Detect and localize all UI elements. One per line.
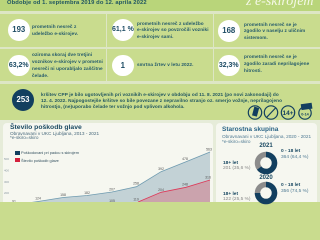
donut 2021: 2021 — [259, 143, 273, 149]
age subheading: *e-skiro=skiro — [222, 139, 251, 144]
stat: 63,2 %: oziroma skoraj dve tretjini — [32, 52, 92, 56]
violation icons: 14+ — [282, 110, 294, 117]
panel: head injuries chart — [3, 123, 213, 202]
stat: 168: zgodilo v naselju z uličnim — [244, 28, 305, 33]
area chart: 316 — [205, 176, 211, 180]
lower background — [0, 120, 320, 202]
violations text: 12. 4. 2022. Najpogostejše kršitve so bile povezane z nepravilno stranjo oz. smerjo vožnje, neprilagojeno — [41, 98, 282, 102]
labels 2021 adults — [223, 160, 250, 171]
labels 2021 adults: 18+ let — [223, 161, 238, 166]
legend: Poškodovani pri padcu s skirojem — [21, 150, 79, 155]
labels 2020 adults: 122 (25,5 %) — [223, 197, 250, 202]
area chart: 248 — [182, 182, 188, 186]
legend — [15, 150, 79, 163]
stat: 61,1 %: e-skirojev sami. — [137, 34, 173, 39]
header band — [0, 0, 320, 11]
age subheading — [222, 134, 311, 144]
stat: 63,2 % — [8, 52, 103, 78]
area chart: 158 — [60, 193, 66, 197]
labels 2021: 364 (64,4 %) — [281, 155, 308, 160]
stat: 61,1 % — [112, 19, 209, 41]
circle: 253: 253 — [16, 95, 30, 104]
labels 2020 adults — [223, 192, 250, 202]
stat: 32,3 %: prometnih nesreč se je — [244, 54, 297, 59]
violations band — [12, 89, 312, 120]
area chart: 119 — [133, 198, 139, 202]
age subheading: Obravnavani v UKC Ljubljana, 2020 - 2021 — [222, 134, 311, 139]
stat: 61,1 %: 61,1 % — [112, 26, 134, 33]
stat: 168: prometnih nesreč se je — [244, 22, 297, 27]
stat: 61,1 %: e-skirojev so povzročili vozniki — [137, 27, 209, 32]
labels 2020: 356 (74,5 %) — [281, 189, 308, 194]
chart subheading: *e-skiro=skiro — [10, 135, 39, 140]
area chart: 207 — [109, 188, 115, 192]
stat: 168: sistemom. — [244, 35, 268, 40]
stat: 63,2 %: 63,2% — [9, 62, 29, 68]
stat: 193 accidents — [8, 19, 78, 41]
stat: 1 fatality — [112, 55, 194, 76]
age heading: Starostna skupina — [222, 126, 278, 133]
stat: 32,3 %: 32,3% — [219, 62, 239, 68]
legend: Število poškodb glave — [21, 158, 59, 162]
area chart: 300 — [4, 180, 9, 184]
stat: 63,2 %: čelade. — [32, 73, 48, 78]
chart subheading — [10, 130, 99, 140]
stat: 193 accidents: udeležbo e-skirojev. — [32, 31, 78, 36]
area chart: 400 — [4, 168, 9, 172]
labels 2020 adults: 18+ let — [223, 192, 238, 197]
area chart: 204 — [158, 188, 164, 192]
period heading: Obdobje od 1. septembra 2019 do 12. aprila 2022 — [7, 0, 147, 6]
area chart: 124 — [35, 196, 41, 200]
labels 2020 — [281, 182, 308, 194]
labels 2021 — [281, 148, 308, 160]
stat: 63,2 %: voznikov e-skirojev v prometni — [32, 59, 103, 64]
donut 2021 — [254, 142, 278, 174]
stat: 193 accidents: 193 — [12, 25, 25, 34]
area chart — [4, 148, 212, 202]
area chart: 478 — [182, 157, 188, 161]
violations text: kršitev CPP je bilo ugotovljenih pri voznikih e-skirojev v obdobju od 11. 8. 2021 (po novi zakonodaji) do — [41, 92, 279, 96]
stat: 1 fatality: smrtna žrtev v letu 2022. — [137, 62, 193, 66]
stat: 168 — [218, 20, 305, 42]
stat: 193 accidents: prometnih nesreč z — [32, 24, 76, 29]
stat: 63,2 %: nesreči ni uporabljalo zaščitne — [32, 66, 103, 71]
donut 2020: 2020 — [259, 175, 273, 181]
circle: 253 — [12, 89, 34, 111]
area chart: 563 — [206, 148, 212, 152]
stat: 32,3 %: zgodilo zaradi neprilagojene — [244, 61, 309, 66]
donut 2020 — [254, 174, 278, 204]
panel: age group — [216, 123, 317, 202]
area chart: 258 — [133, 182, 139, 186]
stat: 32,3 % — [218, 54, 310, 76]
area chart: 392 — [158, 167, 164, 171]
area chart: 200 — [4, 191, 9, 195]
chart subheading: Obravnavani v UKC Ljubljana, 2013 - 2021 — [10, 130, 99, 136]
area chart: 500 — [4, 157, 9, 161]
chart heading: Število poškodb glave — [10, 124, 82, 131]
stat: 32,3 %: hitrosti. — [244, 68, 262, 72]
violations text — [41, 92, 282, 109]
violations text: hitrostjo, (ne)uporabo čelade ter vožnjo pod vplivom alkohola. — [41, 104, 185, 108]
stats dividers — [0, 11, 320, 14]
violation icons: 0-14 — [301, 112, 310, 116]
stat: 168: 168 — [222, 26, 235, 35]
violation icons — [248, 102, 312, 120]
stat: 61,1 %: prometnih nesreč z udeležbo — [137, 21, 204, 26]
labels 2021 adults: 201 (35,6 %) — [223, 166, 250, 171]
stat: 1 fatality: 1 — [121, 60, 125, 70]
labels 2021: 0 - 18 let — [281, 149, 300, 154]
labels 2020: 0 - 18 let — [281, 183, 300, 188]
area chart: 182 — [84, 191, 90, 195]
